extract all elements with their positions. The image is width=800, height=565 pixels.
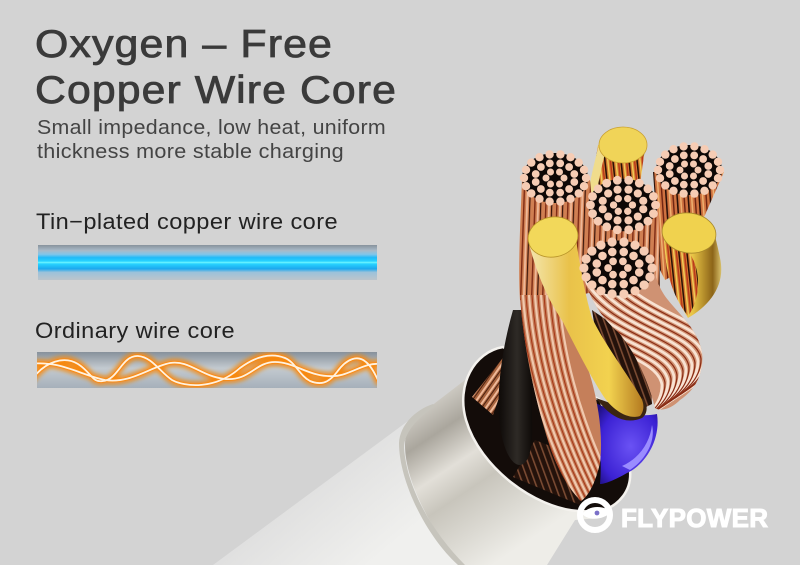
collar opening (463, 347, 630, 512)
back right copper bundle (653, 142, 724, 280)
logo: FlyPower (580, 500, 768, 533)
title (35, 23, 397, 112)
title: Oxygen – Free (35, 23, 333, 66)
inner copper strands (472, 350, 580, 505)
logo wordmark: FLYPOWER (621, 503, 768, 533)
centre copper bundle (586, 176, 660, 290)
right yellow conductor (659, 209, 721, 318)
subtitle: thickness more stable charging (37, 140, 344, 163)
back yellow conductor (588, 127, 647, 195)
front copper bundle (579, 237, 702, 410)
blue insulated wire (590, 400, 658, 484)
title: Copper Wire Core (35, 69, 397, 112)
front left yellow conductor (525, 213, 647, 421)
black insulated wire (499, 310, 532, 465)
cable outer jacket (213, 421, 462, 565)
lower copper twist (520, 295, 602, 501)
label: ordinary wire core: Ordinary wire core (35, 318, 235, 343)
dark strands behind the front bundle (592, 310, 652, 410)
back left copper bundle (519, 150, 600, 300)
logo icon (580, 500, 612, 530)
ordinary wire bar: tangled orange current (30, 352, 380, 388)
tin-plated wire bar: steady blue current (38, 245, 377, 280)
label: tin-plated copper wire core: Tin−plated copper wire core (36, 209, 338, 234)
metal collar (399, 346, 630, 565)
subtitle: Small impedance, low heat, uniform (37, 116, 386, 139)
subtitle (37, 116, 386, 163)
